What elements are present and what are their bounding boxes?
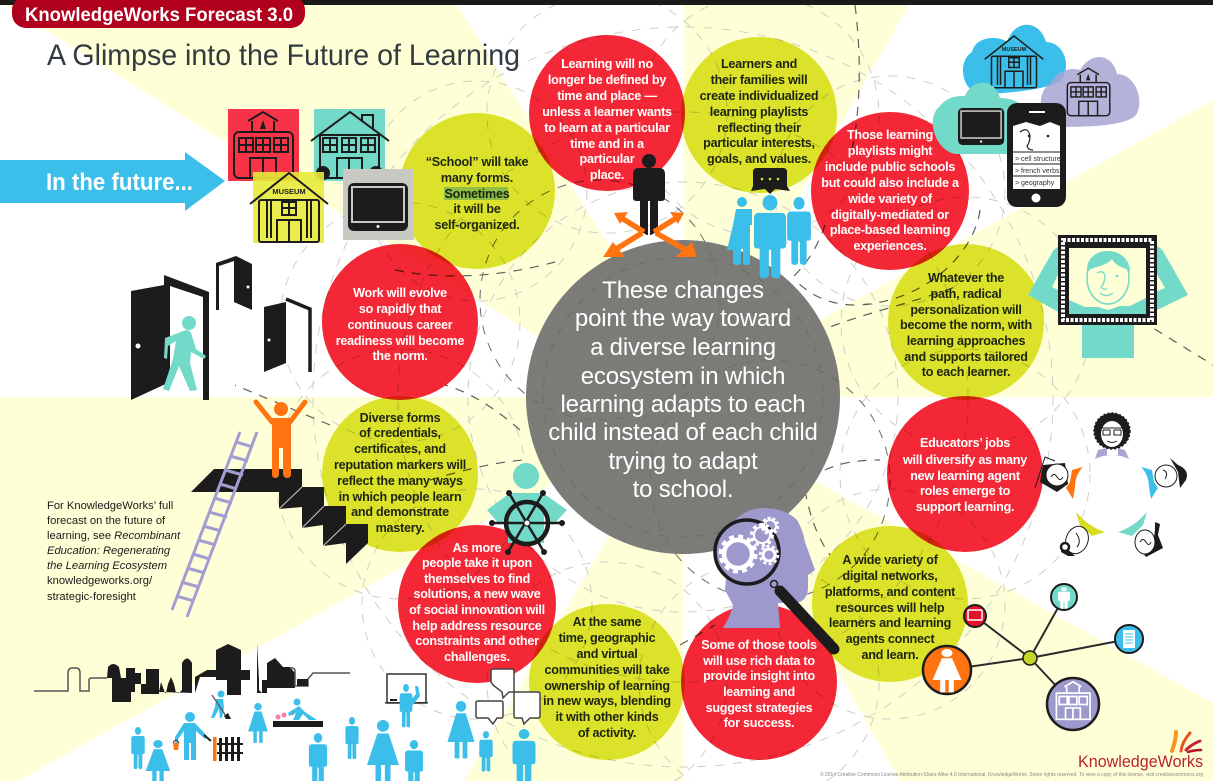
center circle: main message: These changes — [602, 277, 764, 304]
bubble: school will take many forms: self-organized. — [434, 218, 520, 232]
bubble: learning playlists: create individualized — [700, 89, 818, 103]
bubble: playlists might include public schools: place-based learning — [830, 223, 950, 237]
logo: KnowledgeWorks — [1078, 732, 1203, 771]
bubble: learning no longer defined by time and place: place. — [590, 168, 624, 182]
center circle: main message: ecosystem in which — [581, 363, 785, 390]
bubble: social innovation: help address resource — [412, 619, 542, 633]
bubble: communities take ownership: time, geographic — [559, 631, 656, 645]
bubble: rich data tools: suggest strategies — [706, 701, 813, 715]
center circle: main message: trying to adapt — [608, 448, 758, 475]
bubble: learning no longer defined by time and place: Learning will no — [561, 57, 653, 71]
icon: person holding framed portrait — [1028, 235, 1188, 358]
bubble: communities take ownership: and virtual — [577, 647, 637, 661]
bubble: playlists might include public schools: playlists might — [848, 144, 933, 158]
icon: network of nodes — [923, 584, 1143, 730]
bubble: social innovation: challenges. — [444, 650, 510, 664]
text block: where to read the full forecast: knowledgeworks.org/ — [47, 575, 153, 587]
bubble: playlists might include public schools: but could also include a — [821, 176, 960, 190]
bubble: social innovation: of social innovation will — [409, 603, 545, 617]
bubble: learning no longer defined by time and place: particular — [580, 152, 635, 166]
bubble: school will take many forms: many forms. — [441, 171, 513, 185]
bubble: digital networks: agents connect — [846, 632, 935, 646]
text block: where to read the full forecast: Education: Regenerating — [47, 545, 171, 557]
text block: where to read the full forecast — [47, 500, 181, 603]
bubble: communities take ownership: At the same — [573, 615, 642, 629]
center circle: main message: point the way toward — [575, 305, 791, 332]
icon: smartphone with learning list: > french verbs — [1015, 168, 1060, 175]
bubble: credentials: mastery. — [376, 521, 424, 535]
bubble: learning playlists: learning playlists — [710, 105, 808, 119]
center circle: main message: a diverse learning — [590, 334, 776, 361]
bubble: playlists might include public schools: digitally-mediated or — [831, 208, 949, 222]
bubble: radical personalization: and supports tailored — [904, 350, 1028, 364]
bubble: communities take ownership: in new ways, blending — [543, 694, 671, 708]
bubble: credentials: reputation markers will — [334, 458, 466, 472]
bubble: rich data tools — [681, 604, 837, 760]
icon: people in community — [131, 674, 535, 781]
icon: cloud with museum: MUSEUM — [1002, 47, 1027, 53]
bubble: social innovation: As more — [453, 541, 502, 555]
bubble: social innovation: themselves to find — [424, 572, 530, 586]
bubble: digital networks: and learn. — [862, 648, 918, 662]
bubble: learning playlists — [681, 37, 837, 193]
bubble: learning no longer defined by time and place: longer be defined by — [548, 73, 666, 87]
icon: tablet on gray tile — [343, 169, 414, 240]
bubble: work will evolve: so rapidly that — [359, 302, 442, 316]
bubble: credentials: of credentials, — [359, 426, 441, 440]
bubble: school will take many forms: Sometimes — [445, 187, 510, 201]
icon: circle of educators — [1035, 413, 1187, 557]
bubble: learning playlists: reflecting their — [717, 121, 801, 135]
icon: yellow museum — [250, 172, 328, 243]
bubble: radical personalization: to each learner. — [922, 365, 1010, 379]
center circle: main message: to school. — [633, 476, 733, 503]
icon: head with gears and magnifying glass — [715, 508, 834, 649]
icon: helmsman with ship's wheel — [487, 463, 567, 555]
bubble: credentials — [322, 396, 478, 552]
bubble: educators' jobs — [887, 396, 1043, 552]
icon: smartphone with learning list — [1007, 103, 1066, 207]
center circle: main message — [480, 180, 890, 600]
bubble: school will take many forms — [399, 113, 555, 269]
bubble: playlists might include public schools: experiences. — [853, 239, 927, 253]
top black bar — [0, 0, 1213, 5]
text block: where to read the full forecast: For KnowledgeWorks’ full — [47, 500, 173, 512]
arrow: in the future: In the future... — [46, 169, 193, 196]
bubble: radical personalization: learning approaches — [907, 334, 1025, 348]
bubble: work will evolve — [322, 244, 478, 400]
bubble: digital networks — [812, 526, 968, 682]
bubble: educators' jobs: roles emerge to — [920, 484, 1011, 498]
bubble: learning playlists: their families will — [711, 73, 807, 87]
bubble: credentials: Diverse forms — [360, 411, 441, 425]
bubble: rich data tools: for success. — [724, 716, 794, 730]
center circle: main message: child instead of each child — [548, 419, 818, 446]
bubble: playlists might include public schools: wide variety of — [847, 192, 933, 206]
bubble: radical personalization: become the norm, with — [900, 318, 1032, 332]
bubble: social innovation: solutions, a new wave — [413, 587, 541, 601]
bubble: work will evolve: Work will evolve — [353, 286, 447, 300]
bubble: learning no longer defined by time and place — [529, 35, 685, 191]
arrow: in the future — [0, 152, 225, 211]
bubble: credentials: and demonstrate — [351, 505, 449, 519]
bubble: communities take ownership: communities will take — [545, 663, 670, 677]
icon: cloud with museum — [963, 25, 1066, 94]
icon: speech bubbles — [476, 669, 540, 724]
bubble: communities take ownership: it with other kinds — [556, 710, 659, 724]
bubble: learning no longer defined by time and place: to learn at a particular — [544, 121, 670, 135]
bubble: credentials: certificates, and — [354, 442, 446, 456]
bubble: playlists might include public schools: include public schools — [825, 160, 955, 174]
bubble: radical personalization: personalization will — [910, 303, 1022, 317]
bubble: playlists might include public schools: Those learning — [847, 128, 933, 142]
icon: yellow museum: MUSEUM — [272, 187, 306, 196]
title: A Glimpse into the Future of Learning — [47, 39, 520, 72]
text block: where to read the full forecast: the Learning Ecosystem — [47, 560, 167, 572]
icon: smartphone with learning list: > cell structure — [1015, 156, 1061, 163]
bubble: digital networks: digital networks, — [842, 569, 938, 583]
bubble: work will evolve: the norm. — [372, 349, 428, 363]
icon: doors with walking person — [131, 256, 310, 400]
bubble: social innovation — [398, 525, 556, 683]
logo: KnowledgeWorks: KnowledgeWorks — [1078, 752, 1203, 771]
bubble: learning no longer defined by time and place: time and in a — [570, 137, 645, 151]
bubble: credentials: reflect the many ways — [337, 474, 463, 488]
bubble: communities take ownership — [529, 604, 685, 760]
text block: where to read the full forecast: strategic-foresight — [47, 591, 137, 603]
icon: smartphone with learning list: > geography — [1015, 180, 1055, 187]
text block: where to read the full forecast: learning, see Recombinant — [47, 530, 181, 542]
bubble: learning no longer defined by time and place: unless a learner wants — [542, 105, 672, 119]
bubble: educators' jobs: will diversify as many — [902, 453, 1027, 467]
bubble: playlists might include public schools — [811, 112, 969, 270]
icon group: school buildings — [228, 109, 414, 243]
bubble: school will take many forms: it will be — [453, 202, 501, 216]
icon: person with direction arrows — [603, 154, 697, 257]
bubble: digital networks: platforms, and content — [825, 585, 956, 599]
bubble: digital networks: resources will help — [836, 601, 945, 615]
bubble: digital networks: A wide variety of — [842, 553, 939, 567]
bubble: communities take ownership: of activity. — [578, 726, 636, 740]
icon: stairs, ladder and orange climber — [172, 402, 368, 617]
badge: KnowledgeWorks Forecast 3.0: KnowledgeWorks Forecast 3.0 — [25, 5, 293, 26]
bubble: educators' jobs: support learning. — [916, 500, 1014, 514]
bubble: learning no longer defined by time and place: time and place — — [557, 89, 657, 103]
bubble: learning playlists: particular interests, — [703, 136, 815, 150]
bubble: social innovation: constraints and other — [415, 634, 539, 648]
bubble: radical personalization: path, radical — [931, 287, 1001, 301]
icon: cloud with tablet — [933, 83, 1026, 154]
bubble: rich data tools: Some of those tools — [701, 638, 817, 652]
bubble: work will evolve: continuous career — [348, 318, 453, 332]
icon: cloud with school — [1041, 57, 1139, 127]
bubble: learning playlists: Learners and — [721, 57, 797, 71]
bubble: digital networks: learners and learning — [829, 616, 951, 630]
bubble: communities take ownership: ownership of learning — [544, 679, 670, 693]
bubble: school will take many forms: “School” will take — [426, 155, 529, 169]
center circle: main message: learning adapts to each — [561, 391, 805, 418]
bubble: work will evolve: readiness will become — [336, 334, 464, 348]
icon: teal house — [311, 109, 389, 181]
bubble: learning playlists: goals, and values. — [707, 152, 811, 166]
bubble: educators' jobs: new learning agent — [910, 469, 1021, 483]
icon: city skyline — [34, 643, 350, 702]
bubble: educators' jobs: Educators’ jobs — [920, 436, 1010, 450]
icon: family of three with speech bubble — [727, 168, 811, 278]
bubble: radical personalization: Whatever the — [928, 271, 1004, 285]
bubble: rich data tools: learning and — [723, 685, 795, 699]
icon: red school — [228, 109, 299, 181]
bubble: rich data tools: provide insight into — [703, 669, 815, 683]
bubble: radical personalization — [888, 244, 1044, 400]
bubble: credentials: in which people learn — [339, 490, 461, 504]
bubble: social innovation: people take it upon — [422, 556, 532, 570]
text block: where to read the full forecast: forecast on the future of — [47, 515, 166, 527]
bubble: rich data tools: will use rich data to — [702, 654, 815, 668]
